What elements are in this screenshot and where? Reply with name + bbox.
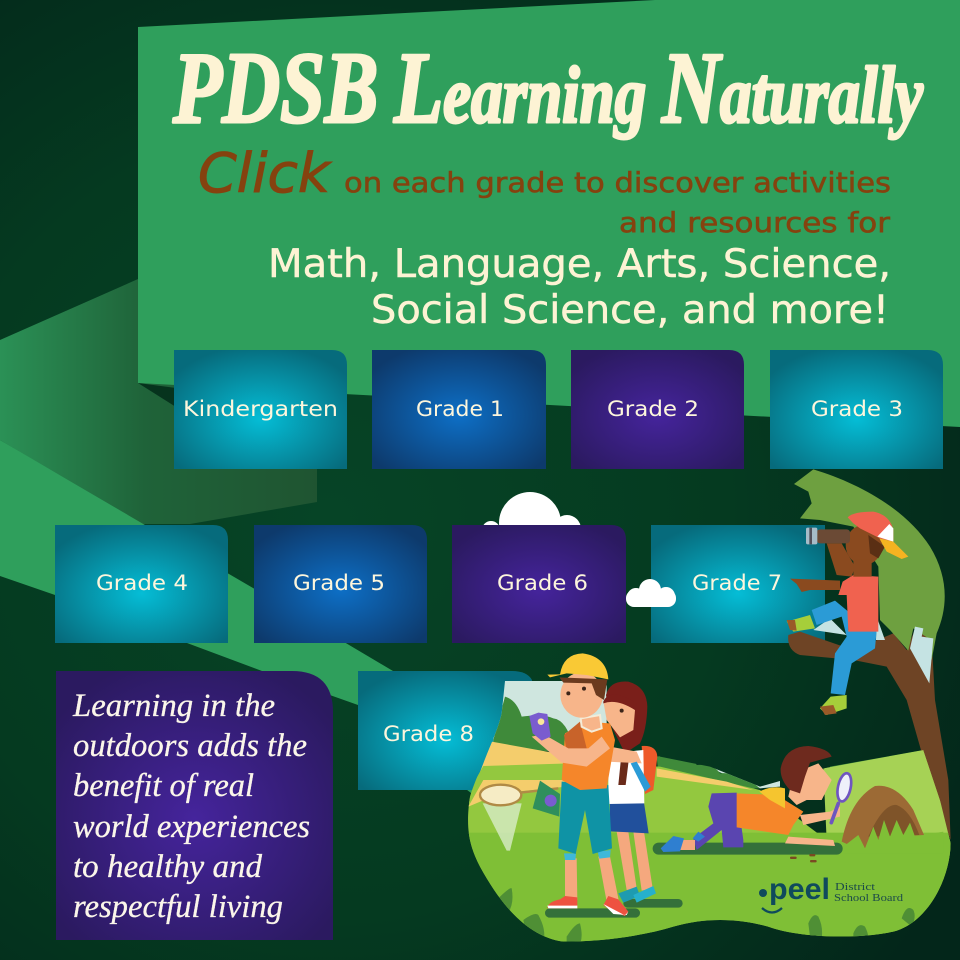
sleeve bbox=[564, 722, 588, 763]
subjects line 2: Social Science, and more! bbox=[371, 288, 889, 333]
quote text: benefit of real bbox=[73, 768, 254, 804]
button: Grade 4: Grade 4 bbox=[96, 571, 188, 595]
girl shirt bbox=[608, 750, 644, 804]
girl eye bbox=[620, 709, 624, 713]
tree trunk bbox=[788, 617, 951, 840]
quote text: world experiences bbox=[73, 809, 310, 845]
illustration: tree and boy with binoculars bbox=[787, 469, 951, 840]
butterfly net bbox=[480, 785, 558, 851]
girl face bbox=[603, 700, 635, 737]
right tree line bbox=[657, 755, 760, 790]
click word: Click bbox=[198, 142, 333, 205]
shirt bbox=[562, 722, 615, 790]
boy with flower bbox=[529, 653, 628, 916]
front arm bbox=[800, 807, 840, 825]
logo district: District bbox=[835, 882, 875, 893]
ground shadows bbox=[545, 843, 843, 918]
girl bbox=[590, 681, 657, 903]
landscape blob bbox=[460, 680, 960, 947]
cap brim bbox=[879, 538, 908, 559]
girl braid bbox=[618, 750, 630, 785]
instruction line 2: and resources for bbox=[619, 206, 891, 239]
quote text: outdoors adds the bbox=[73, 728, 307, 764]
quote text: Learning in the bbox=[72, 688, 275, 724]
tan field bbox=[468, 742, 563, 806]
quote panel bbox=[56, 671, 333, 940]
dirt mound bbox=[790, 786, 943, 862]
shoe 2 bbox=[693, 832, 705, 842]
girl hair bbox=[606, 681, 647, 753]
girl arm bbox=[590, 738, 642, 763]
shorts cuffs bbox=[564, 853, 576, 860]
hat on back bbox=[759, 787, 785, 808]
girl legs bbox=[617, 832, 637, 890]
boy sandals bbox=[787, 615, 847, 715]
far sky right bbox=[714, 768, 780, 788]
button: Grade 7 bbox=[651, 525, 825, 643]
header panel bbox=[138, 0, 960, 427]
button: Grade 7: Grade 7 bbox=[692, 571, 782, 595]
logo smile bbox=[762, 908, 782, 912]
girl skirt bbox=[610, 798, 649, 833]
boy shirt bbox=[838, 575, 878, 632]
button: Grade 3 bbox=[770, 350, 943, 469]
button: Grade 1 bbox=[372, 350, 546, 469]
boy cap bbox=[848, 512, 893, 542]
button: Grade 5 bbox=[254, 525, 427, 643]
tree line bbox=[493, 697, 573, 753]
back arm bbox=[785, 837, 835, 846]
far right tree line bbox=[830, 750, 920, 768]
grass tufts bbox=[843, 820, 943, 853]
instruction text bbox=[198, 142, 891, 239]
button: Grade 2: Grade 2 bbox=[607, 397, 699, 421]
shoes bbox=[547, 896, 577, 908]
quote text: respectful living bbox=[73, 889, 283, 925]
subjects line 1: Math, Language, Arts, Science, bbox=[268, 242, 891, 287]
booklet flower bbox=[545, 795, 557, 807]
background shape: bright green band bbox=[0, 440, 480, 800]
boy pointing arm bbox=[790, 579, 840, 592]
button: Grade 6: Grade 6 bbox=[497, 571, 588, 595]
map booklet bbox=[533, 781, 560, 817]
boy trousers bbox=[812, 601, 877, 695]
foreground ground bbox=[460, 833, 960, 946]
shorts bbox=[558, 782, 612, 854]
boy neck bbox=[853, 560, 872, 577]
boy head bbox=[846, 525, 882, 565]
illustration: children in field bbox=[460, 653, 960, 947]
field green bbox=[460, 763, 960, 947]
tan foreground bbox=[468, 780, 567, 807]
face bbox=[560, 672, 603, 718]
logo school board: School Board bbox=[834, 893, 904, 904]
background shape: mid green facet bbox=[0, 200, 317, 524]
boy legs bbox=[565, 858, 577, 900]
leaves bbox=[497, 888, 915, 943]
sky bbox=[493, 680, 607, 747]
boy hair bbox=[868, 535, 885, 558]
button: Kindergarten: Kindergarten bbox=[183, 397, 338, 421]
instruction line 1: on each grade to discover activities bbox=[344, 166, 891, 199]
button: Grade 3: Grade 3 bbox=[811, 397, 903, 421]
cap panel bbox=[877, 524, 893, 542]
trousers bbox=[693, 793, 743, 850]
shirt bbox=[737, 793, 803, 835]
shoe 1 bbox=[661, 836, 684, 852]
button: Grade 1: Grade 1 bbox=[416, 397, 504, 421]
head bbox=[788, 763, 832, 805]
foot bbox=[680, 840, 695, 850]
quote text: to healthy and bbox=[73, 849, 262, 885]
button: Grade 6 bbox=[452, 525, 626, 643]
arm bbox=[532, 734, 610, 767]
flower in phone bbox=[529, 713, 551, 741]
subjects text bbox=[268, 242, 891, 333]
hair bbox=[781, 746, 832, 793]
crawling boy bbox=[661, 746, 854, 852]
quote text bbox=[72, 688, 310, 925]
logo dot bbox=[759, 889, 767, 897]
sky gaps bbox=[813, 617, 933, 683]
logo wordmark: peel bbox=[769, 873, 830, 906]
tan path bbox=[657, 768, 753, 790]
cap bbox=[547, 653, 608, 679]
hair bbox=[559, 677, 607, 700]
girl hair fringe bbox=[603, 695, 637, 710]
eyes bbox=[566, 691, 570, 695]
boy raised arm bbox=[827, 543, 855, 577]
dirt crumbs bbox=[790, 854, 817, 862]
button: Kindergarten bbox=[174, 350, 347, 469]
button: Grade 8 bbox=[358, 671, 532, 790]
binoculars bbox=[806, 528, 850, 544]
panel shadow bbox=[138, 383, 176, 407]
cloud: small bbox=[626, 579, 676, 607]
light green hill bbox=[823, 750, 953, 840]
button: Grade 2 bbox=[571, 350, 744, 469]
cloud: large bbox=[482, 492, 581, 554]
neck and collar bbox=[581, 715, 602, 732]
title: PDSB Learning Naturally bbox=[172, 32, 923, 145]
girl backpack bbox=[642, 746, 657, 794]
girl strap bbox=[631, 762, 651, 792]
button: Grade 4 bbox=[55, 525, 228, 643]
logo: Peel District School Board bbox=[759, 873, 904, 912]
magnifying glass bbox=[831, 772, 854, 823]
button: Grade 8: Grade 8 bbox=[383, 722, 474, 746]
girl shoes bbox=[618, 887, 640, 903]
tree foliage bbox=[794, 469, 945, 660]
button: Grade 5: Grade 5 bbox=[293, 571, 385, 595]
